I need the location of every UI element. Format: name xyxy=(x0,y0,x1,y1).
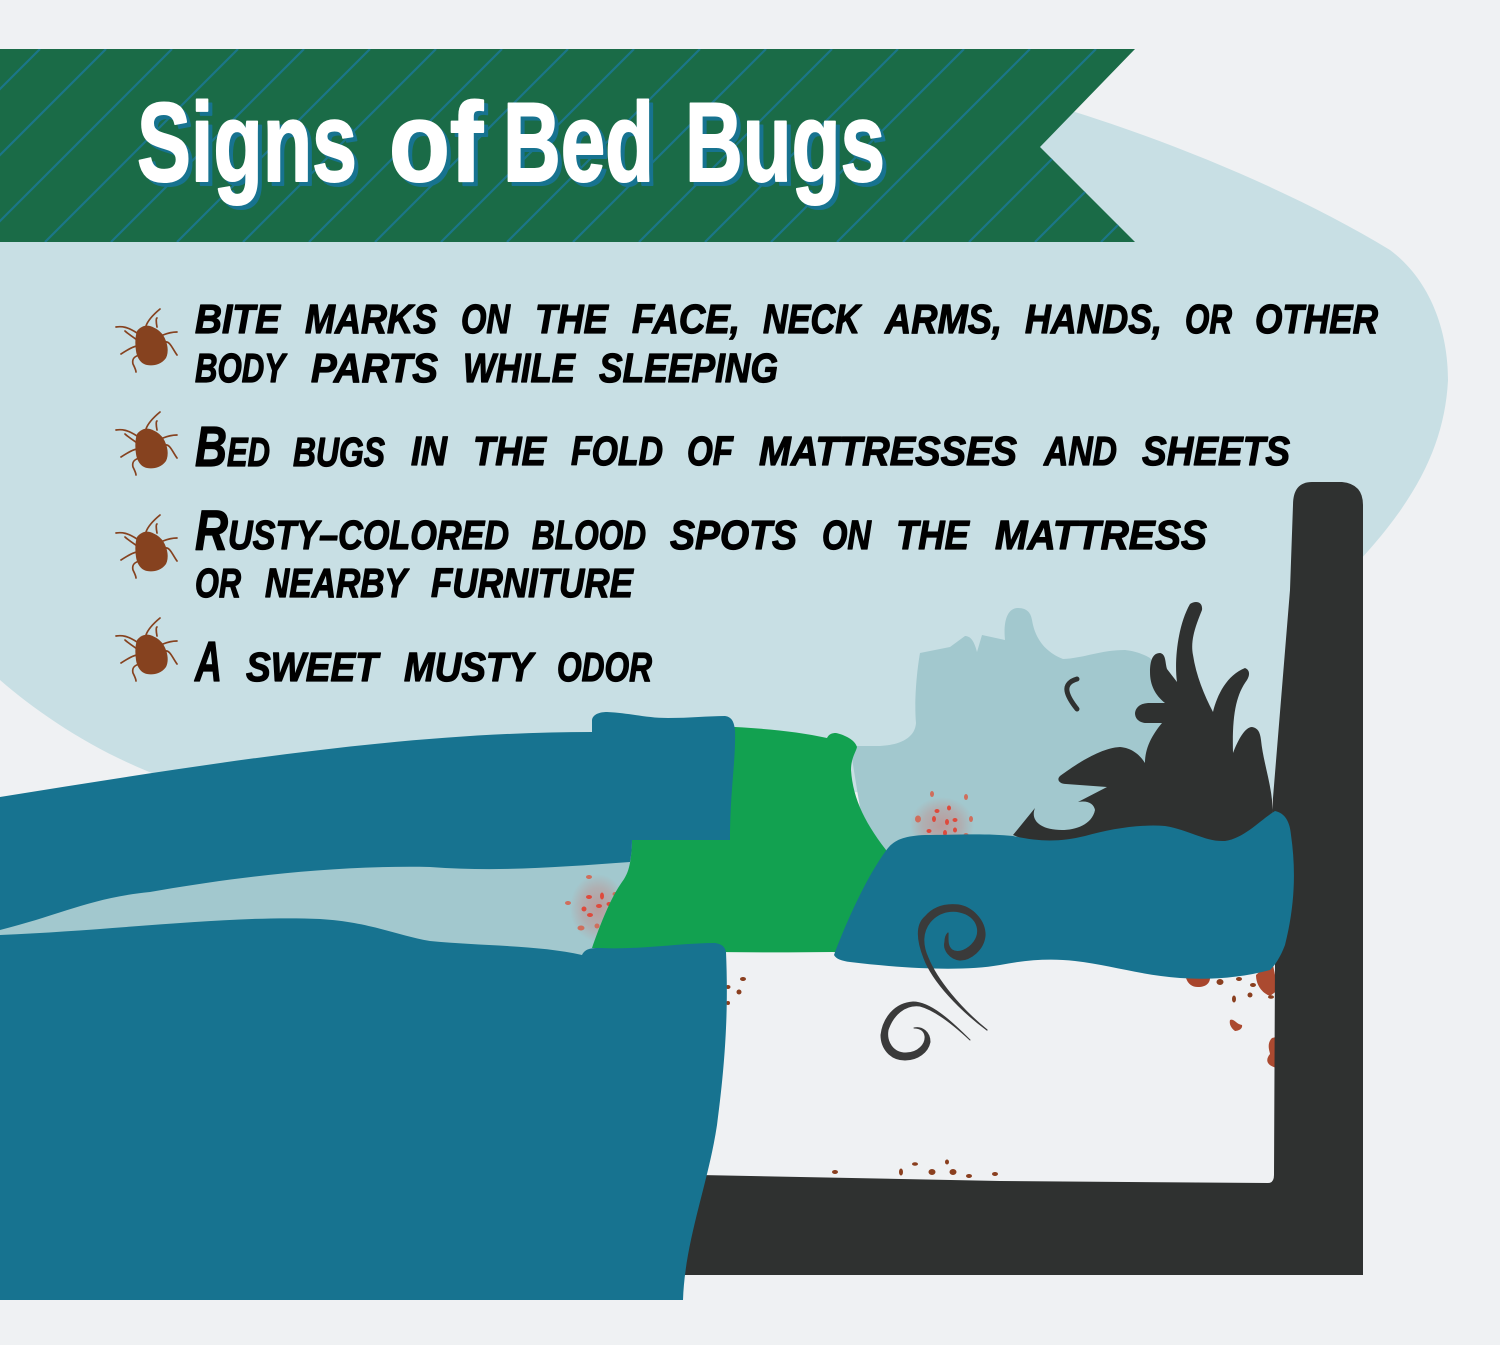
sign 2: bed bugs in folds: BUGS xyxy=(293,429,385,475)
sign 4: musty odor: MUSTY xyxy=(404,644,536,690)
sign 2: bed bugs in folds xyxy=(195,415,1290,479)
sign 2: bed bugs in folds: AND xyxy=(1043,428,1117,474)
sign 3: rusty blood spots: NEARBY xyxy=(265,560,410,606)
odor swirl upper xyxy=(918,905,987,1030)
sign 2: bed bugs in folds: SHEETS xyxy=(1142,428,1290,474)
sign 1: bite marks: THE xyxy=(535,296,609,342)
sign 4: musty odor: SWEET xyxy=(246,644,381,690)
title banner xyxy=(0,49,1135,242)
title: of xyxy=(389,80,484,205)
sign 1: bite marks xyxy=(195,296,1378,391)
sign 1: bite marks: HANDS, xyxy=(1025,296,1162,342)
sign 3: rusty blood spots xyxy=(195,499,1207,606)
person: closed eye xyxy=(1067,679,1077,709)
sign 3: rusty blood spots: R xyxy=(195,499,228,563)
headboard and bed frame xyxy=(683,482,1363,1275)
sign 2: bed bugs in folds: B xyxy=(195,415,227,479)
sign 1: bite marks: NECK xyxy=(763,296,863,342)
sign 3: rusty blood spots: ON xyxy=(822,512,872,558)
sign 3: rusty blood spots: SPOTS xyxy=(670,512,797,558)
sign 1: bite marks: FACE, xyxy=(632,296,740,342)
person: face and neck xyxy=(850,608,1260,870)
sign 1: bite marks: SLEEPING xyxy=(599,345,778,391)
icon: bed bug 1 xyxy=(116,309,177,372)
title: Bed xyxy=(503,80,654,205)
sign 2: bed bugs in folds: ED xyxy=(227,429,270,475)
sign 3: rusty blood spots: OR xyxy=(195,560,241,606)
icon: bed bug 4 xyxy=(116,618,177,681)
sign 3: rusty blood spots: FURNITURE xyxy=(431,560,634,606)
sign 3: rusty blood spots: USTY–COLORED xyxy=(228,512,509,558)
blood spots on mattress xyxy=(726,960,1280,1178)
sign 1: bite marks: MARKS xyxy=(305,296,437,342)
sign 1: bite marks: BODY xyxy=(195,345,288,391)
sign 1: bite marks: OR xyxy=(1185,296,1232,342)
sign 2: bed bugs in folds: OF xyxy=(687,428,734,474)
title: Bugs xyxy=(685,80,885,205)
background blob xyxy=(0,100,1448,800)
title xyxy=(137,80,885,205)
sign 2: bed bugs in folds: IN xyxy=(411,428,448,474)
person: green shirt xyxy=(592,725,890,955)
person: hair xyxy=(1013,602,1272,850)
pillow xyxy=(834,811,1294,979)
bite marks on leg xyxy=(565,874,626,942)
sign 1: bite marks: BITE xyxy=(195,296,281,342)
mattress xyxy=(700,945,1285,1183)
sign 1: bite marks: ON xyxy=(461,296,511,342)
sign 4: musty odor: A xyxy=(194,630,222,694)
sign 3: rusty blood spots: THE xyxy=(896,512,970,558)
icon: bed bug 2 xyxy=(116,412,177,475)
person: leg xyxy=(0,850,640,965)
sign 4: musty odor: ODOR xyxy=(557,644,652,690)
upper blanket xyxy=(0,712,735,930)
lower blanket xyxy=(0,918,727,1300)
sign 3: rusty blood spots: BLOOD xyxy=(532,512,646,558)
sign 2: bed bugs in folds: MATTRESSES xyxy=(759,428,1017,474)
icon: bed bug 3 xyxy=(116,515,177,578)
sign 2: bed bugs in folds: THE xyxy=(473,428,547,474)
sign 1: bite marks: ARMS, xyxy=(884,296,1002,342)
sign 1: bite marks: PARTS xyxy=(311,345,438,391)
sign 2: bed bugs in folds: FOLD xyxy=(571,428,663,474)
sign 3: rusty blood spots: MATTRESS xyxy=(995,512,1207,558)
sign 1: bite marks: WHILE xyxy=(463,345,576,391)
bite marks on neck xyxy=(910,791,974,853)
title: Signs xyxy=(137,80,357,205)
sign 1: bite marks: OTHER xyxy=(1255,296,1378,342)
odor swirl lower xyxy=(881,1002,970,1060)
sign 4: musty odor xyxy=(194,630,652,694)
